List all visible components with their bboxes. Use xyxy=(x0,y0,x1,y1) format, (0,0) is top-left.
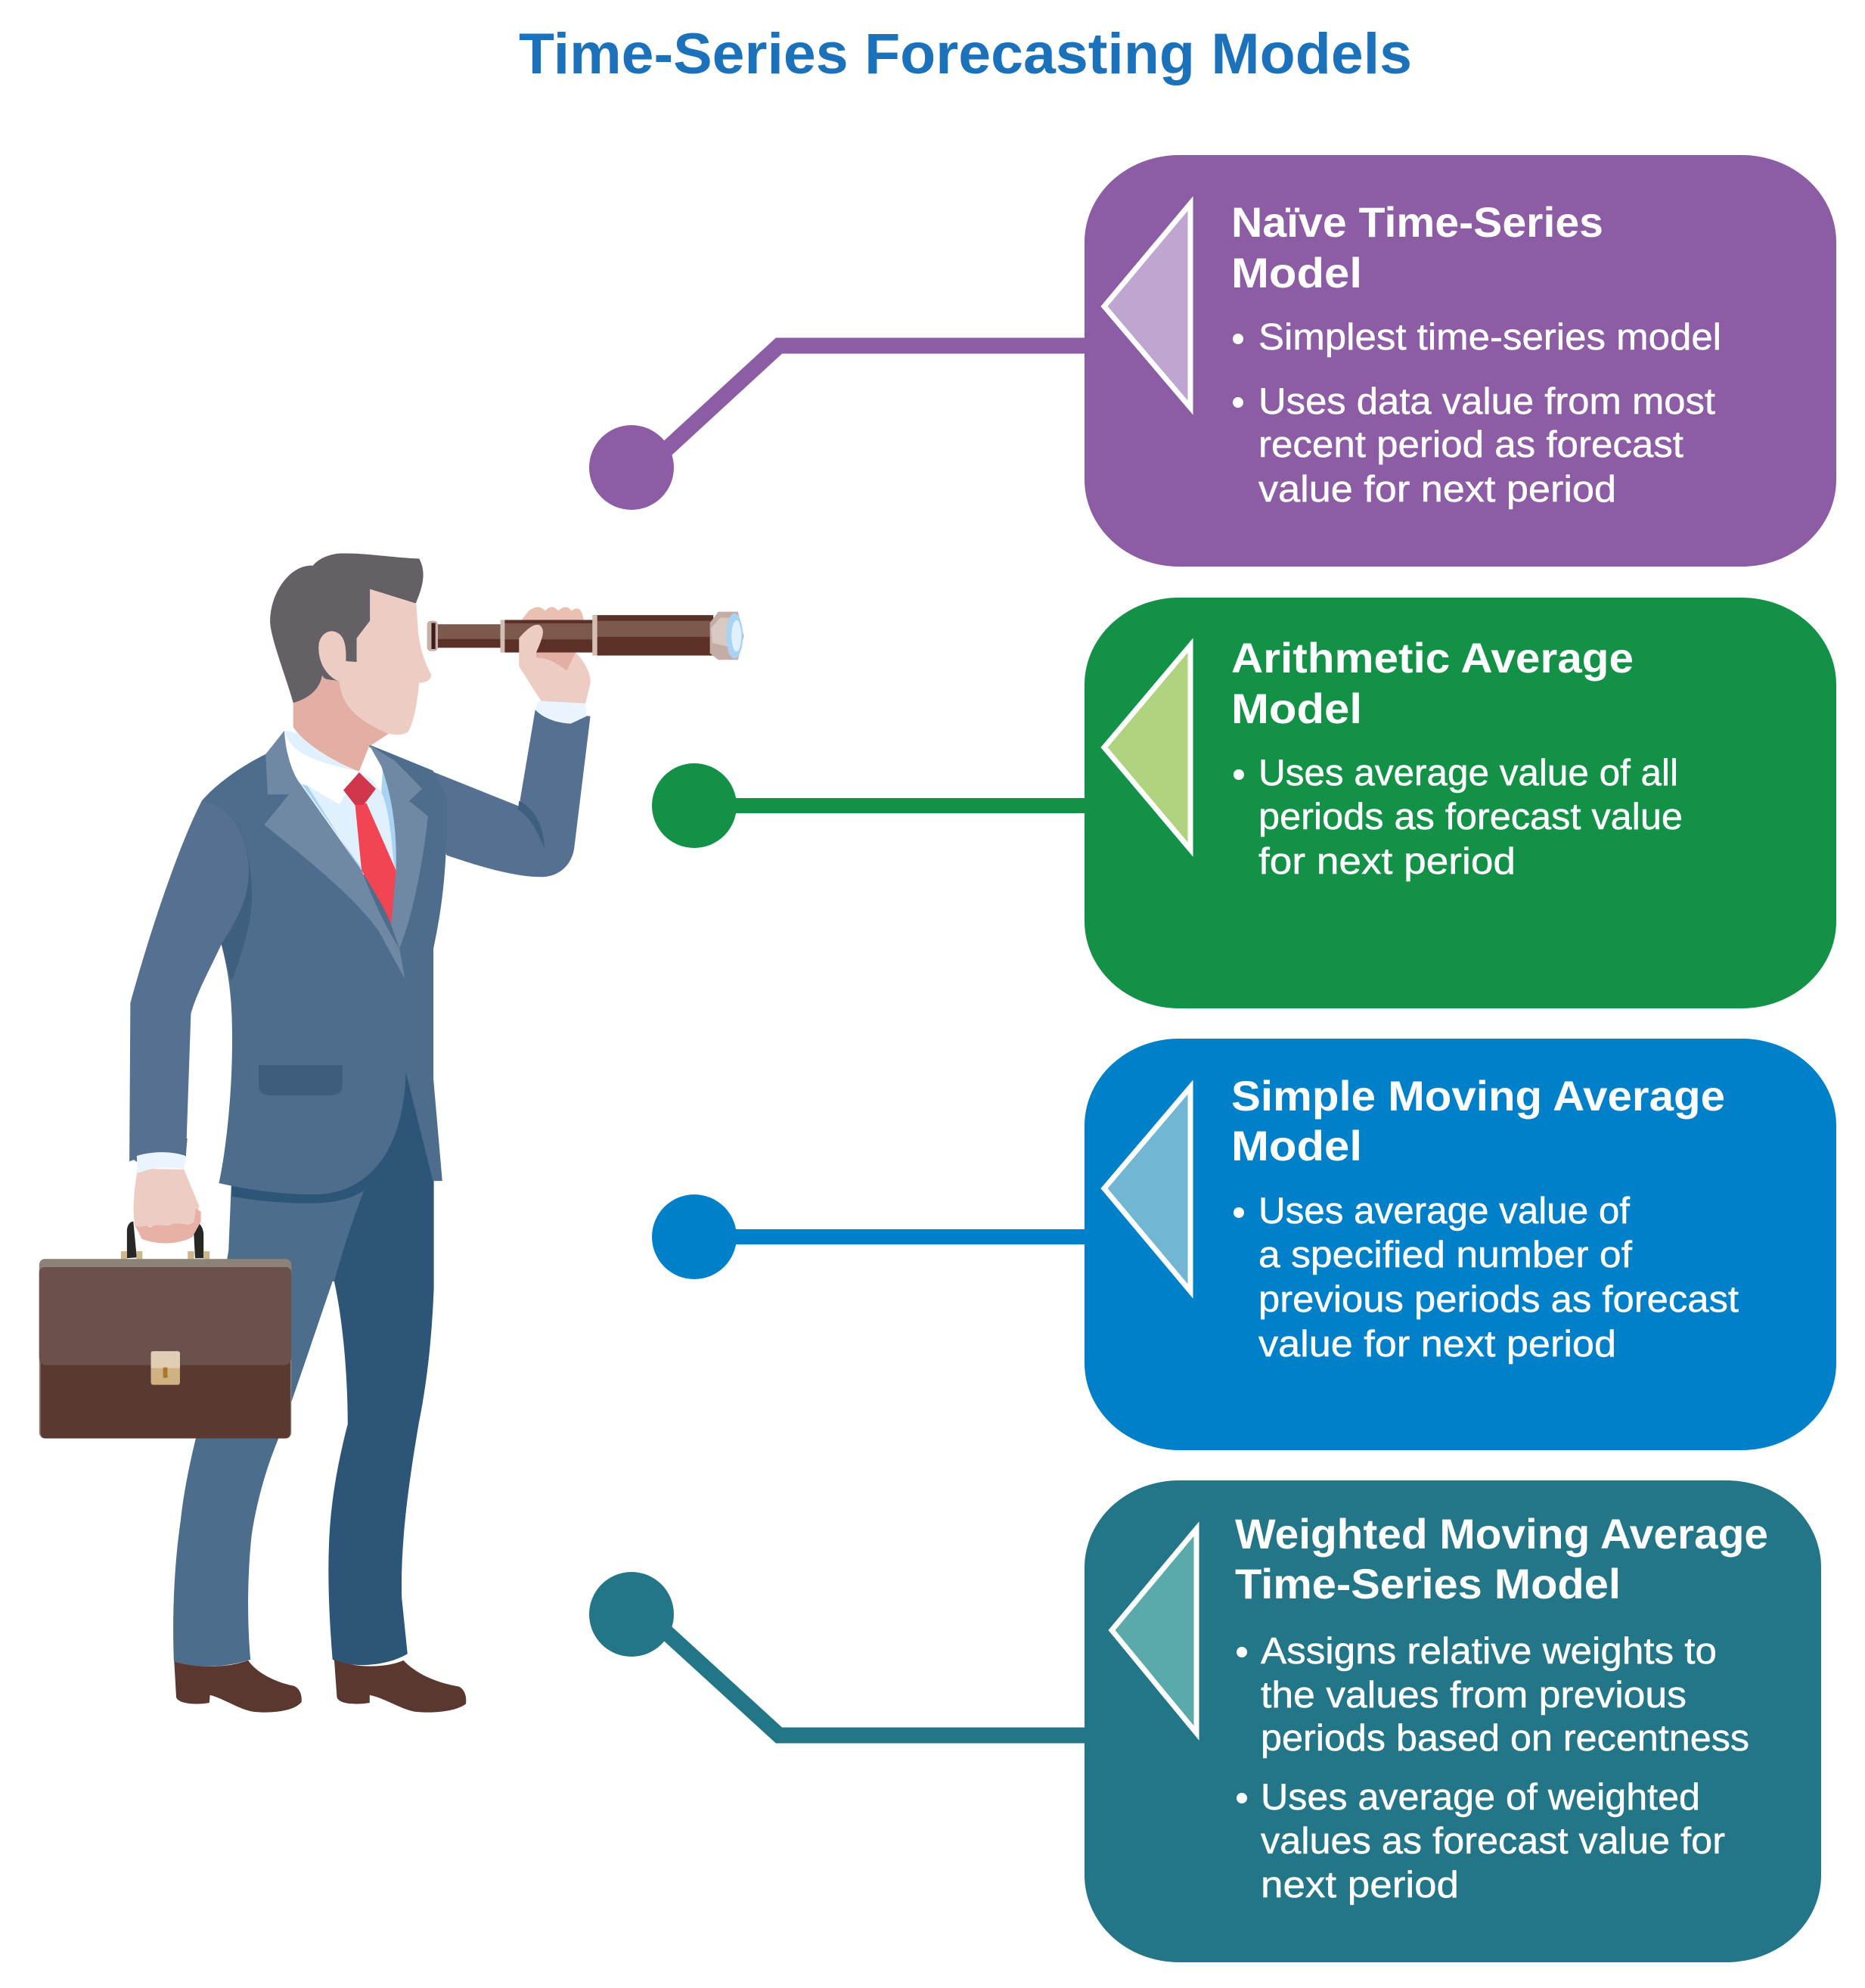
bullet list xyxy=(1237,1631,1749,1906)
title: Time-Series Forecasting Models xyxy=(519,22,1412,86)
bullet list: values as forecast value for xyxy=(1261,1821,1725,1862)
bullet list: Simplest time-series model xyxy=(1258,317,1721,358)
bullet list: value for next period xyxy=(1258,1324,1616,1365)
panel: Simple Moving Average Model: Model xyxy=(1231,1122,1362,1170)
bullet list xyxy=(1234,1191,1739,1365)
heading: Weighted Moving Average xyxy=(1235,1510,1768,1558)
heading: Simple Moving Average xyxy=(1231,1072,1725,1120)
connector: Weighted Moving Average model xyxy=(589,1572,1089,1735)
panel: Naïve Time-Series Model xyxy=(1085,155,1836,567)
bullet list xyxy=(1234,753,1683,882)
panel: Weighted Moving Average Time-Series Model xyxy=(1085,1480,1821,1962)
heading: Arithmetic Average xyxy=(1231,634,1634,682)
bullet list: periods based on recentness xyxy=(1261,1718,1749,1759)
left hand and briefcase xyxy=(39,1138,291,1439)
bullet list: next period xyxy=(1261,1865,1459,1906)
bullet list: Uses average value of all xyxy=(1258,753,1678,794)
connector: Naïve model xyxy=(589,346,1089,510)
panel: Weighted Moving Average Time-Series Model: Time-Series Model xyxy=(1235,1560,1621,1607)
bullet list: previous periods as forecast xyxy=(1258,1279,1739,1320)
bullet list: Uses average of weighted xyxy=(1261,1777,1700,1818)
bullet list: recent period as forecast xyxy=(1258,424,1683,465)
bullet list: Uses data value from most xyxy=(1258,381,1715,422)
bullet list: periods as forecast value xyxy=(1258,797,1683,837)
icon: pointer triangle xyxy=(1104,203,1190,408)
figure: businessman with telescope and briefcase xyxy=(39,554,744,1713)
connector: Arithmetic Average model xyxy=(652,763,1088,848)
panel: Naïve Time-Series Model: Model xyxy=(1231,249,1362,297)
upper body, head and telescope xyxy=(129,554,744,1194)
panel: Arithmetic Average Model: Model xyxy=(1231,685,1362,732)
heading: Naïve Time-Series xyxy=(1231,198,1603,246)
icon: pointer triangle xyxy=(1104,645,1190,850)
bullet list: value for next period xyxy=(1258,469,1616,510)
bullet list: a specified number of xyxy=(1258,1235,1632,1275)
icon: pointer triangle xyxy=(1104,1087,1190,1291)
bullet list xyxy=(1233,317,1721,510)
bullet list: Uses average value of xyxy=(1258,1191,1630,1232)
bullet list: Assigns relative weights to xyxy=(1261,1631,1717,1672)
bullet list: the values from previous xyxy=(1261,1675,1687,1716)
panel: Arithmetic Average Model xyxy=(1085,598,1836,1008)
bullet list: for next period xyxy=(1258,841,1516,882)
trousers and shoes xyxy=(173,1050,466,1713)
panel: Simple Moving Average Model xyxy=(1085,1039,1836,1450)
connector: Simple Moving Average model xyxy=(652,1194,1088,1279)
icon: pointer triangle xyxy=(1112,1529,1196,1733)
